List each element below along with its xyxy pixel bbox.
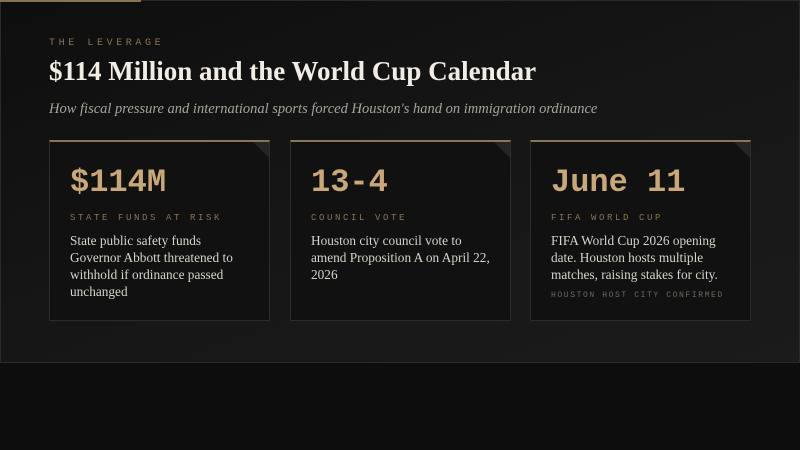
stat label: FIFA WORLD CUP — [551, 213, 663, 223]
accent bar — [0, 0, 141, 2]
stat number: $114M — [70, 164, 166, 201]
description: FIFA World Cup 2026 opening date. Houston hosts multiple matches, raising stakes for city. — [551, 233, 718, 282]
subtitle: How fiscal pressure and international sports forced Houston's hand on immigration ordinance — [49, 101, 597, 117]
stat number: 13-4 — [311, 164, 388, 201]
description: State public safety funds Governor Abbott threatened to withhold if ordinance passed unchanged — [70, 233, 233, 299]
stat label: STATE FUNDS AT RISK — [70, 213, 222, 223]
stat number: June 11 — [551, 164, 685, 201]
card: council vote — [290, 140, 511, 321]
footnote: HOUSTON HOST CITY CONFIRMED — [551, 291, 724, 300]
stat label: COUNCIL VOTE — [311, 213, 407, 223]
description: Houston city council vote to amend Proposition A on April 22, 2026 — [311, 233, 490, 282]
card: world cup — [530, 140, 751, 321]
title: $114 Million and the World Cup Calendar — [49, 56, 536, 86]
kicker: THE LEVERAGE — [49, 38, 164, 49]
card: state funds — [49, 140, 270, 321]
